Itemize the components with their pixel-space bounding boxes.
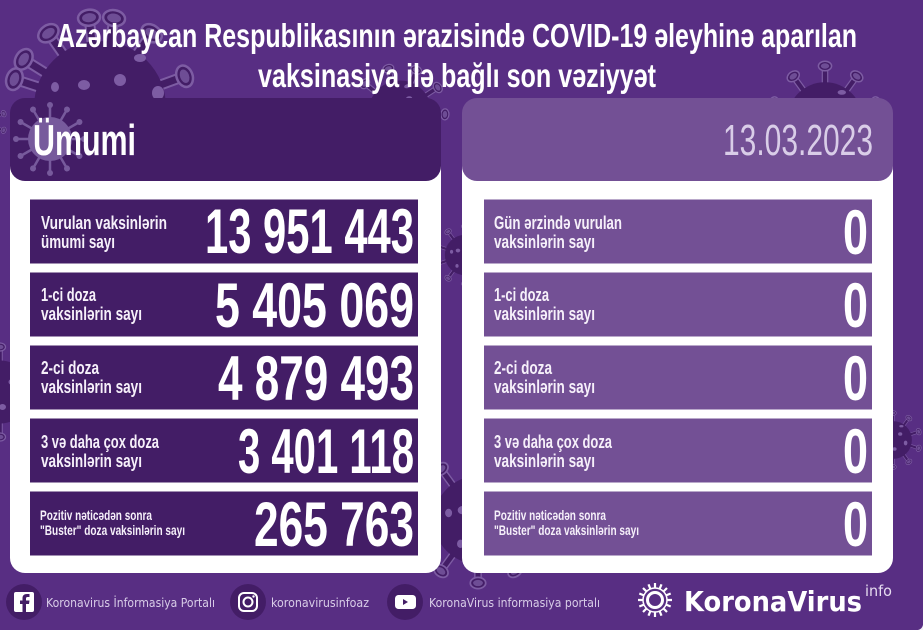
row: daily second dose: 2-ci doza [494, 358, 553, 378]
row: booster dose [30, 490, 418, 560]
panel: daily figures [462, 98, 893, 573]
row: second dose [30, 344, 418, 414]
row: daily vaccines: 0 [843, 198, 868, 268]
panel: overall totals [10, 98, 441, 573]
row: daily second dose [484, 344, 872, 414]
row: first dose: 1-ci doza [41, 285, 97, 305]
row: daily first dose: 0 [843, 271, 868, 341]
row: daily booster dose: "Buster" doza vaksinlərin sayı [494, 522, 639, 538]
row: booster dose: 265 763 [254, 490, 414, 560]
row: total vaccines: Vurulan vaksinlərin [41, 213, 167, 233]
row: total vaccines [30, 197, 418, 267]
row: second dose: vaksinlərin sayı [41, 377, 142, 397]
footer: social links [6, 584, 600, 620]
icon: virus in header [13, 102, 87, 176]
row: daily vaccines [484, 198, 872, 268]
row: daily vaccines: Gün ərzində vurulan [494, 213, 622, 233]
row: first dose: 5 405 069 [215, 271, 414, 341]
row: daily third dose: 0 [843, 417, 868, 487]
row: second dose: 4 879 493 [218, 344, 414, 414]
row: daily second dose: 0 [843, 344, 868, 414]
row: first dose: vaksinlərin sayı [41, 304, 142, 324]
row: daily second dose: vaksinlərin sayı [494, 377, 595, 397]
row: daily third dose [484, 417, 872, 487]
row: daily first dose: 1-ci doza [494, 285, 550, 305]
row: total vaccines: ümumi sayı [41, 232, 115, 252]
title: vaksinasiya ilə bağlı son vəziyyət [258, 57, 656, 94]
row: daily booster dose: Pozitiv nəticədən sonra [494, 507, 606, 523]
row: second dose: 2-ci doza [41, 358, 100, 378]
panel header: Ümumi: Ümumi [33, 116, 136, 165]
icon: instagram [230, 584, 266, 620]
row: third dose [30, 417, 418, 487]
row: third dose: vaksinlərin sayı [41, 451, 142, 471]
row: total vaccines: 13 951 443 [205, 197, 414, 267]
corner: bottom right [918, 625, 923, 630]
row: daily first dose [484, 271, 872, 341]
facebook label: Koronavirus İnformasiya Portalı [46, 595, 215, 610]
panel header: date [462, 98, 893, 181]
row: daily booster dose [484, 490, 872, 560]
panel background: overall [10, 110, 441, 573]
row: first dose [30, 271, 418, 341]
youtube label: KoronaVirus informasiya portalı [429, 596, 600, 610]
title [57, 17, 857, 94]
instagram label: koronavirusinfoaz [271, 596, 369, 610]
row: third dose: 3 401 118 [238, 417, 414, 487]
logo: KoronaVirus info: info [865, 582, 892, 600]
logo: KoronaVirus info: KoronaVirus [684, 585, 862, 618]
row: booster dose: Pozitiv nəticədən sonra [40, 507, 152, 523]
row: daily third dose: 3 və daha çox doza [494, 432, 613, 452]
row: daily booster dose: 0 [843, 490, 868, 560]
icon: facebook [6, 584, 42, 620]
row: booster dose: "Buster" doza vaksinlərin sayı [40, 522, 185, 538]
icon: youtube [387, 584, 423, 620]
row: third dose: 3 və daha çox doza [41, 432, 160, 452]
row: daily vaccines: vaksinlərin sayı [494, 232, 595, 252]
row: daily third dose: vaksinlərin sayı [494, 451, 595, 471]
panel background: daily [462, 110, 893, 573]
panel header: Ümumi [10, 98, 441, 181]
row: daily first dose: vaksinlərin sayı [494, 304, 595, 324]
logo: KoronaVirus info [638, 582, 892, 618]
icon: sun-shaped virus [638, 583, 672, 617]
